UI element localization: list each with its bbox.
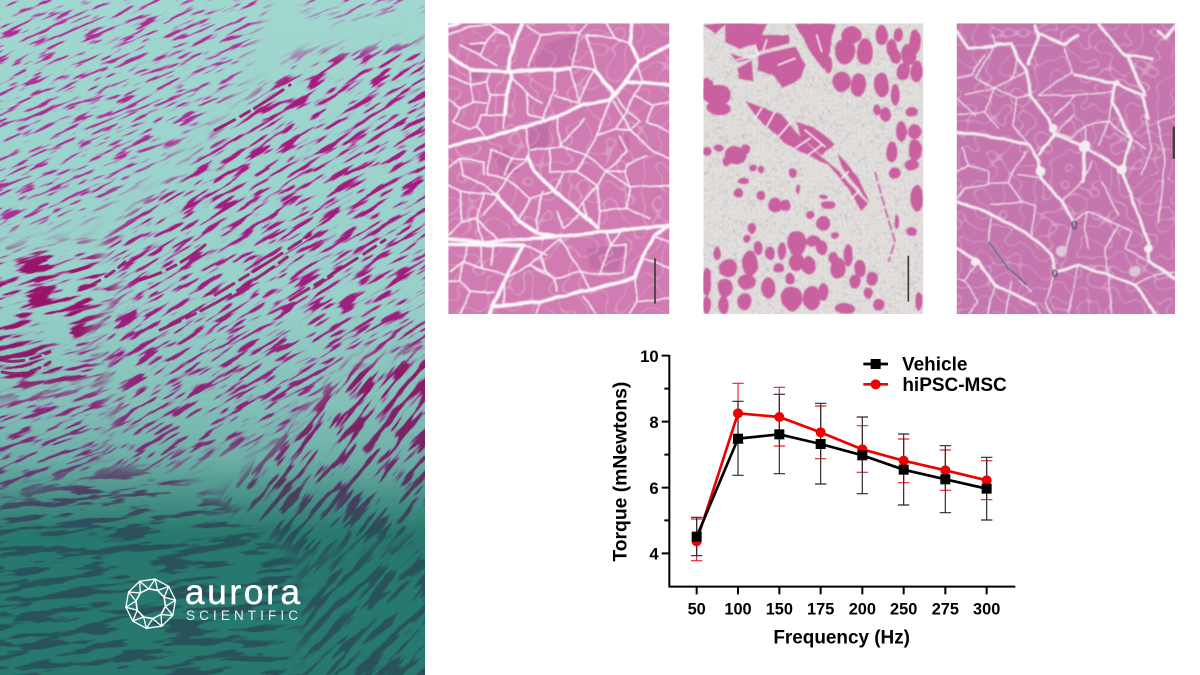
series: Vehicle line [692,429,992,542]
x-axis tick labels: 300 [973,601,1000,619]
legend: hiPSC-MSC [902,375,1007,396]
x-axis tick labels: 200 [849,601,876,619]
series: Vehicle error bars [691,394,992,556]
x-axis title: Frequency (Hz) [773,627,910,648]
axes [662,355,1015,594]
scale bar [908,256,910,302]
icon: gem logo mark [123,575,178,632]
panel: healthy muscle micrograph [448,23,670,314]
x-axis tick labels: 175 [807,601,834,619]
y-axis tick labels: 10 [640,347,659,366]
series: hiPSC-MSC line [692,408,992,546]
chart: torque vs frequency [610,347,1015,648]
y-axis tick labels: 4 [649,545,659,564]
legend: Vehicle [902,355,967,376]
image edge mark [1173,127,1175,159]
x-axis tick labels: 50 [688,601,706,619]
scale bar [654,258,656,304]
x-axis tick labels: 150 [766,601,793,619]
y-axis tick labels [640,347,659,564]
panel: treated muscle micrograph [957,23,1175,314]
legend [863,355,1007,396]
y-axis tick labels: 8 [649,413,659,432]
x-axis tick labels [688,601,1000,619]
panel: damaged muscle micrograph with fat infiltration [702,23,923,314]
wordmark: SCIENTIFIC: SCIENTIFIC [186,608,298,623]
x-axis tick labels: 275 [932,601,959,619]
logo: Aurora Scientific [123,573,301,632]
wordmark: aurora: aurora [185,573,301,612]
dark vessel and nuclei [988,221,1077,285]
stained connective strand [875,172,895,262]
y-axis tick labels: 6 [649,479,659,498]
x-axis tick labels: 100 [724,601,752,619]
panel: teal-tinted muscle histology background [0,0,425,675]
x-axis tick labels: 250 [890,601,917,619]
y-axis title: Torque (mNewtons) [610,382,631,562]
series: hiPSC-MSC error bars [691,383,992,561]
